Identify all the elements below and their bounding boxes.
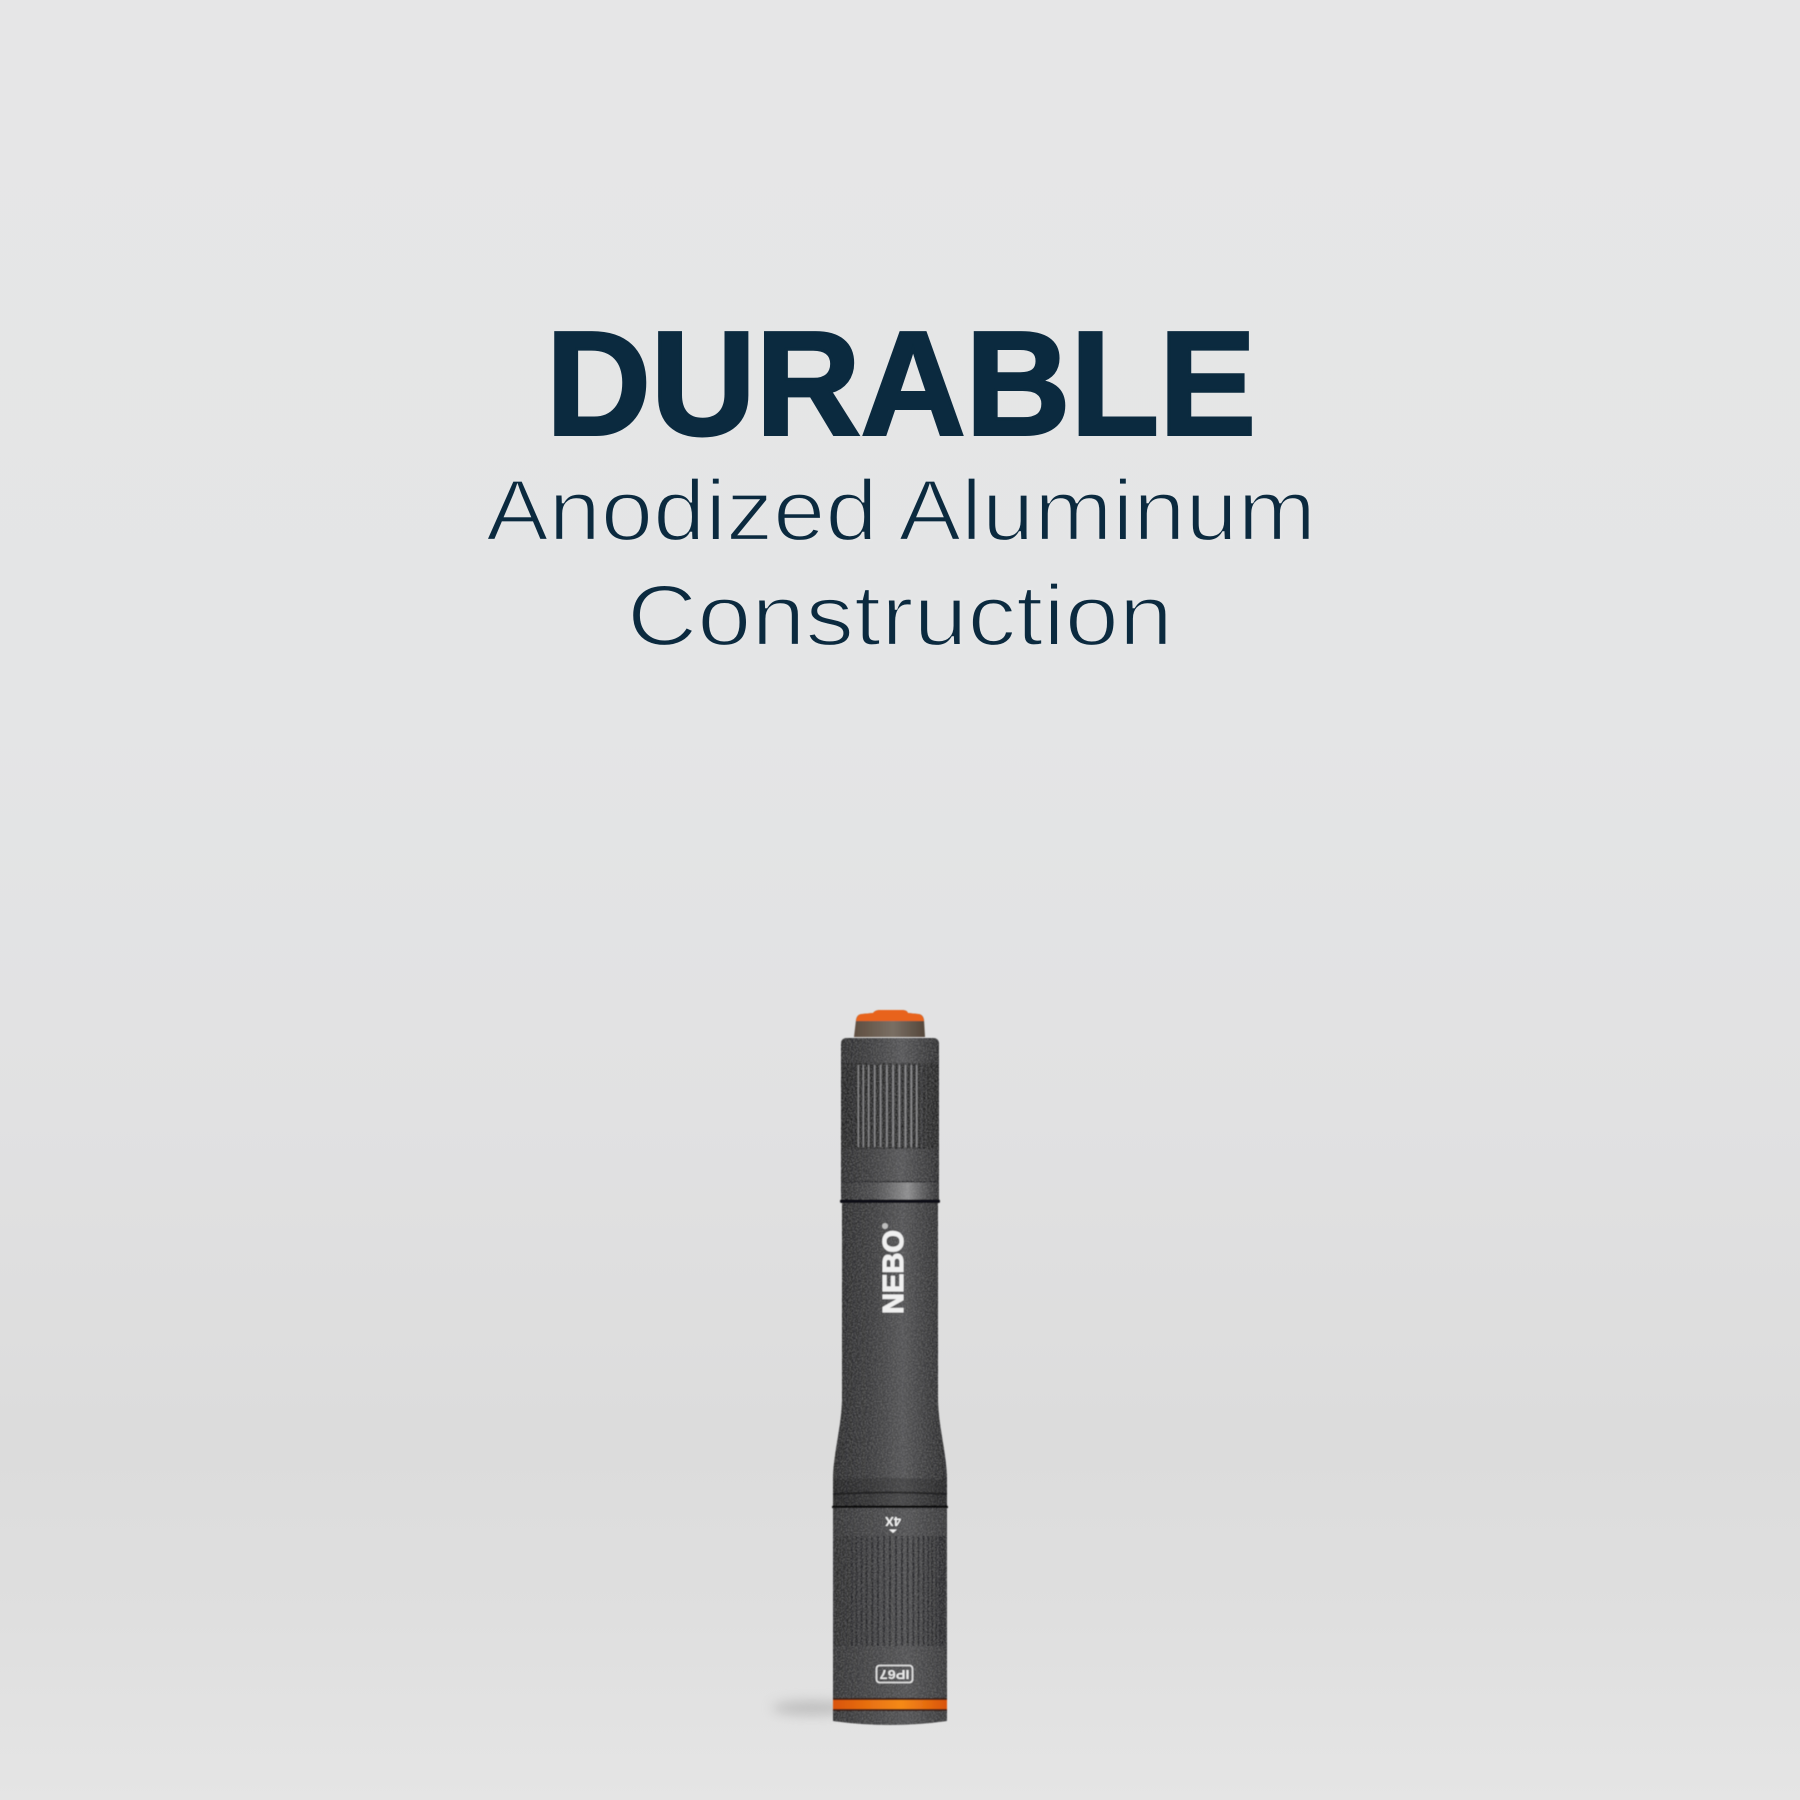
- tail knurl lines: [836, 1536, 944, 1646]
- orange ring: [833, 1698, 947, 1711]
- black joint line: [840, 1200, 940, 1203]
- IP67 badge: [876, 1666, 912, 1682]
- tail knurl edge shading: [833, 1536, 851, 1646]
- knurl dark lines: [843, 1063, 937, 1149]
- IP67 badge: IP67: [879, 1667, 910, 1682]
- head with knurled grip: [841, 1038, 939, 1200]
- floor shadow: [772, 1701, 852, 1715]
- flashlight: [832, 1010, 948, 1725]
- subheading: Anodized Aluminum Construction: Anodized Aluminum: [486, 463, 1316, 559]
- orange switch button: [854, 1010, 925, 1037]
- NEBO logo: NEBO: [878, 1230, 910, 1314]
- groove line: [833, 1492, 947, 1494]
- black joint line lower: [832, 1506, 948, 1508]
- tail section: [833, 1508, 947, 1725]
- flashlight body: [833, 1203, 947, 1507]
- subheading: Anodized Aluminum Construction: Construction: [627, 568, 1173, 664]
- 4X mark: 4X: [885, 1514, 901, 1529]
- body lower band grooves: [833, 1478, 947, 1506]
- knurl light lines: [858, 1065, 917, 1147]
- subheading: Anodized Aluminum Construction: [486, 463, 1316, 664]
- registered mark: [882, 1223, 888, 1229]
- heading: DURABLE: DURABLE: [546, 302, 1256, 466]
